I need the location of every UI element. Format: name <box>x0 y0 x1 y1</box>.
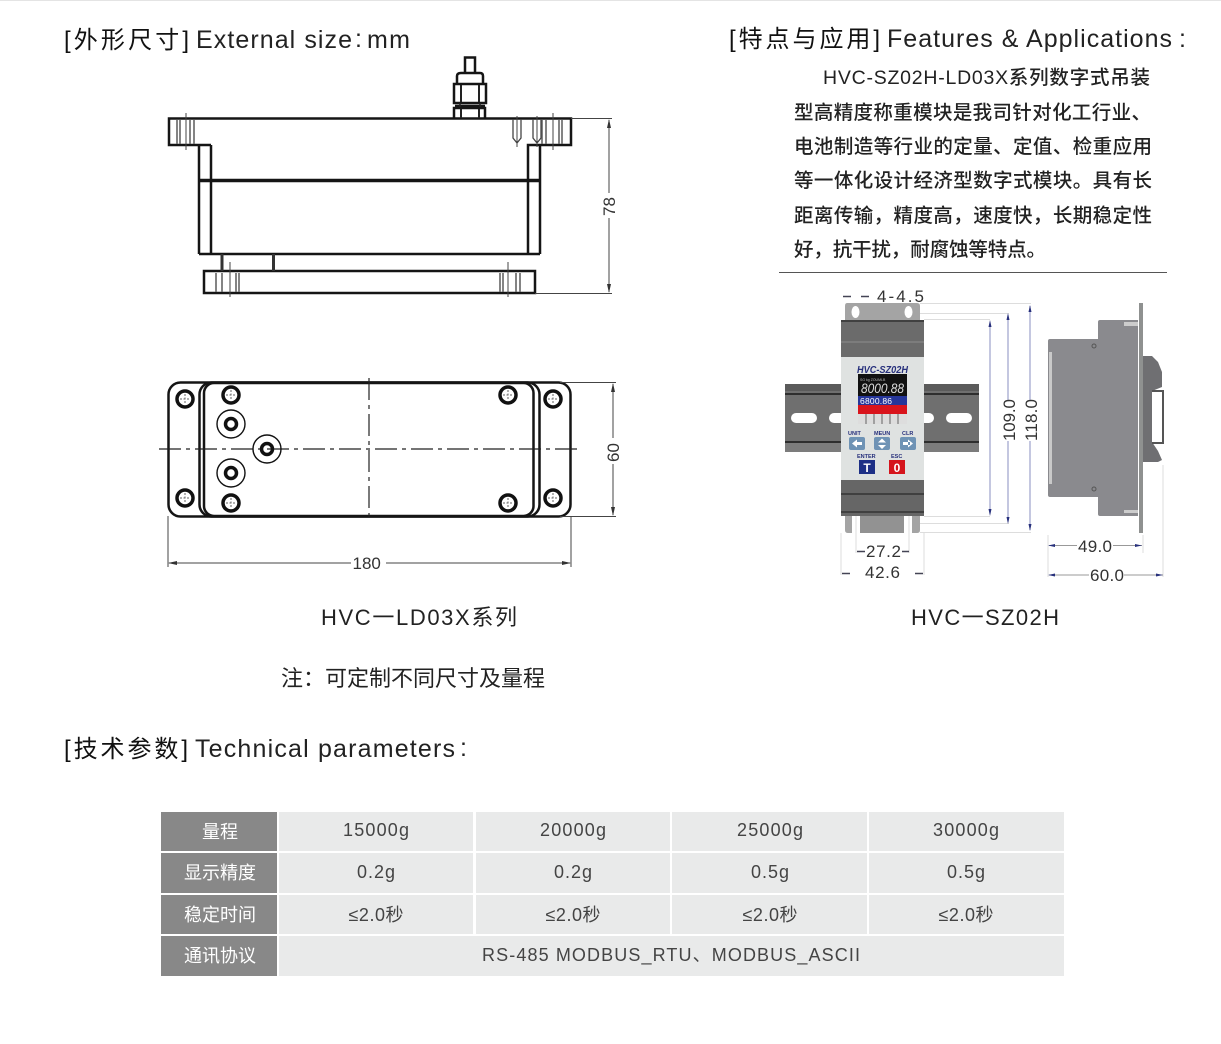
dimension: height 78 <box>535 118 619 294</box>
cells <box>279 812 1064 976</box>
text block: product description: 等一体化设计经济型数字式模块。具有长 <box>794 170 1152 192</box>
diagram: HVC-SZ02H side view <box>1048 303 1163 585</box>
row: settling time: ≤2.0秒 <box>348 905 404 925</box>
display screen <box>858 374 907 424</box>
dimensions: 109.0 <box>1000 399 1019 441</box>
heading: features and applications: : <box>1179 25 1186 53</box>
heading: external size: External size <box>196 26 352 54</box>
text block: product description: 距离传输，精度高，速度快，长期稳定性 <box>794 205 1152 227</box>
text block: product description <box>794 67 1152 261</box>
dimensions: 49.0 <box>1078 537 1112 556</box>
row: settling time: ≤2.0秒 <box>546 905 600 925</box>
row: display precision <box>357 862 985 882</box>
text block: product description: 好，抗干扰，耐腐蚀等特点。 <box>794 239 1046 261</box>
dimensions: 4-4.5 <box>877 287 924 306</box>
keypad: CLR <box>902 431 913 437</box>
heading: external size: [外形尺寸] <box>64 27 189 54</box>
row: display precision: 0.5g <box>947 862 985 882</box>
mounting clamps <box>841 303 924 533</box>
heading: features and applications <box>729 25 1186 53</box>
keypad: ESC <box>891 454 902 460</box>
text block: product description: 电池制造等行业的定量、定值、检重应用 <box>794 136 1152 158</box>
drawing: side view of load module <box>169 58 619 297</box>
row: range: 20000g <box>540 820 606 840</box>
dimensions <box>841 287 1041 582</box>
display screen: 8000.88 <box>861 380 904 396</box>
row: settling time: ≤2.0秒 <box>742 905 798 925</box>
dimensions: 27.2 <box>866 542 901 561</box>
dimensions: 60.0 <box>1090 566 1124 585</box>
row: display precision: 0.2g <box>554 862 592 882</box>
row headers: 显示精度 <box>184 863 256 883</box>
row: range: 15000g <box>343 820 409 840</box>
heading: technical parameters: Technical parameters <box>195 735 455 763</box>
keypad: T <box>863 461 871 475</box>
note: custom sizes: 注：可定制不同尺寸及量程 <box>281 666 545 691</box>
dimensions <box>1048 465 1163 585</box>
heading: features and applications: [特点与应用] <box>729 26 880 53</box>
row: display precision: 0.5g <box>751 862 789 882</box>
row headers <box>161 812 277 976</box>
dimension: height 78: 78 <box>600 197 619 216</box>
keypad: ENTER <box>857 454 876 460</box>
keypad: UNIT <box>848 431 861 437</box>
device face <box>841 357 924 480</box>
row headers: 量程 <box>202 822 238 842</box>
row headers: 稳定时间 <box>184 905 256 925</box>
heading: technical parameters <box>64 734 467 763</box>
heading: external size <box>64 25 410 54</box>
heading: features and applications: Features & Applications <box>887 25 1172 53</box>
DIN rail <box>785 384 979 452</box>
row: protocol: RS-485 MODBUS_RTU、MODBUS_ASCII <box>482 945 860 966</box>
heading: external size: mm <box>367 26 410 54</box>
row: range: 30000g <box>933 820 999 840</box>
dimensions: 42.6 <box>865 563 900 582</box>
caption: HVC-SZ02H: HVC一SZ02H <box>911 605 1059 630</box>
text block: product description: 型高精度称重模块是我司针对化工行业、 <box>794 102 1151 124</box>
row: range: 25000g <box>737 820 803 840</box>
heading: technical parameters: [技术参数] <box>64 736 188 763</box>
text block: product description: HVC-SZ02H-LD03X系列数字式吊装 <box>823 67 1150 89</box>
dimension: height 60: 60 <box>604 443 623 462</box>
dimension: width 180 <box>168 516 571 573</box>
display screen: SG kg ZOUMLB <box>860 378 886 382</box>
row: display precision: 0.2g <box>357 862 395 882</box>
dimension: height 60 <box>560 382 623 516</box>
keypad <box>848 431 916 475</box>
heading: external size: : <box>355 25 362 53</box>
row: settling time <box>348 905 994 925</box>
device name: HVC-SZ02H <box>857 365 909 376</box>
table: technical parameters <box>161 812 1064 976</box>
diagram: HVC-SZ02H front view <box>785 287 1041 582</box>
row: settling time: ≤2.0秒 <box>938 905 994 925</box>
caption: HVC-LD03X series: HVC一LD03X系列 <box>321 605 517 630</box>
display screen: 6800.86 <box>860 396 892 406</box>
drawing: top view of load module <box>159 378 623 573</box>
row: range <box>343 820 999 840</box>
row headers: 通讯协议 <box>184 946 256 966</box>
dimensions: 118.0 <box>1022 399 1041 441</box>
keypad: 0 <box>894 461 901 475</box>
heading: technical parameters: : <box>460 734 467 762</box>
dimension: width 180: 180 <box>352 554 381 573</box>
keypad: MEUN <box>874 431 890 437</box>
